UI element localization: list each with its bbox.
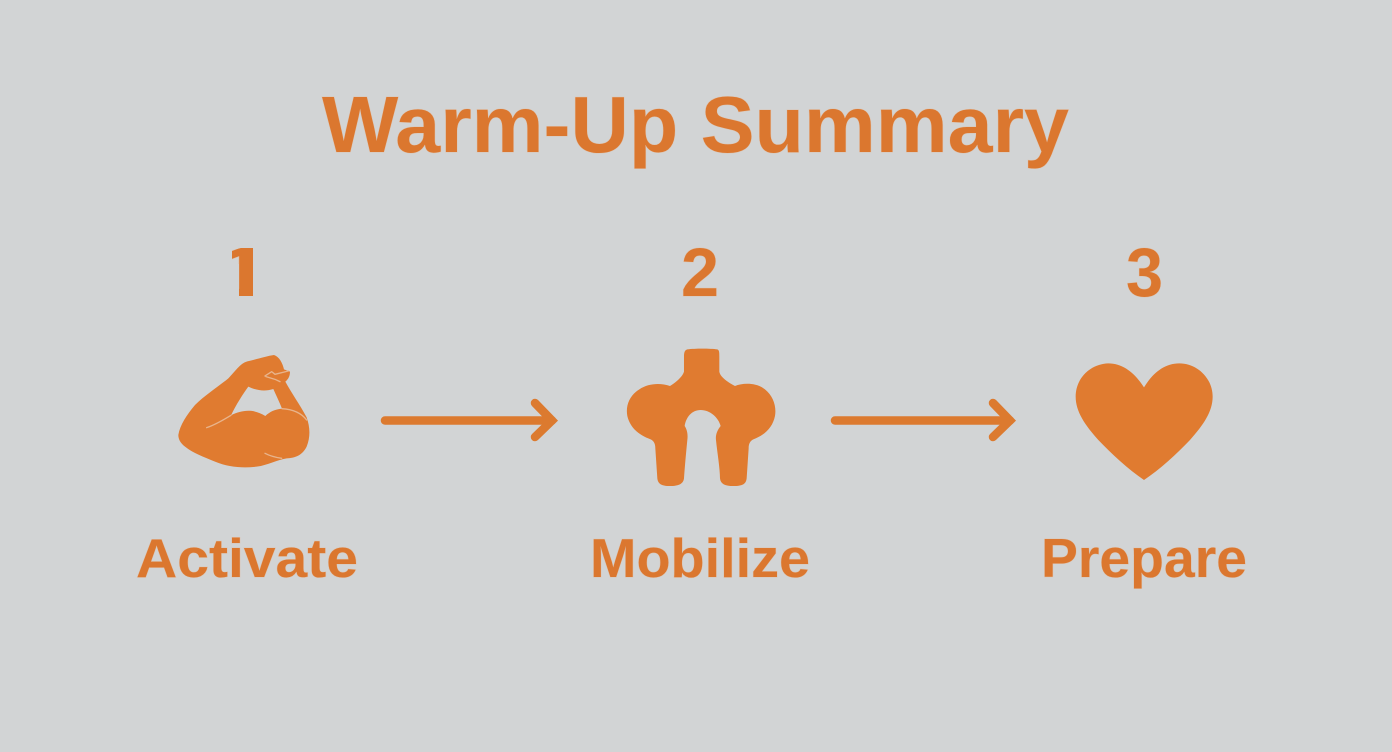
icon: joint [627, 349, 775, 486]
step 1 number: 1 [212, 233, 278, 311]
label: Mobilize: Mobilize [590, 527, 810, 589]
label: Activate: Activate [136, 527, 358, 589]
arrow 2 [835, 403, 1010, 437]
step 3 number: 3 [1126, 234, 1163, 311]
arrow 1 [385, 403, 552, 437]
icon: flexed arm [178, 355, 309, 467]
arm detail lines [207, 371, 307, 458]
title: Warm-Up Summary [322, 80, 1070, 169]
step 2 number: 2 [681, 234, 719, 311]
label: Prepare: Prepare [1041, 527, 1247, 589]
icon: heart [1076, 363, 1213, 480]
